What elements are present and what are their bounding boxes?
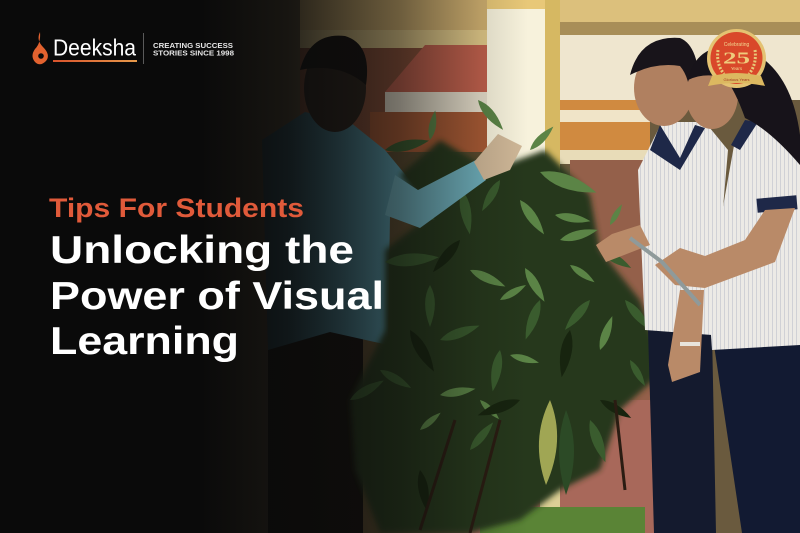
subtitle: Tips For Students [49,193,304,223]
tagline: CREATING SUCCESS [153,41,233,50]
bush [348,97,665,533]
badge: 25 years [707,29,766,88]
title [50,229,384,363]
badge: 25 years: Celebrating [724,42,750,48]
badge: 25 years: Years [731,66,743,71]
roof tile [385,45,487,92]
title: Power of Visual [50,275,384,318]
bush mass [350,140,665,533]
student right [655,45,800,533]
man's arm and hand [385,134,522,228]
badge: 25 years: Glorious Years [723,77,750,82]
tagline [153,41,234,58]
tagline: STORIES SINCE 1998 [153,48,234,58]
divider [143,33,144,64]
students [596,38,800,533]
underline [53,60,137,62]
man in blue shirt [262,36,486,533]
student left [596,38,728,533]
icon: flame [32,32,48,64]
badge: 25 years: 25 [723,48,750,68]
logo: Deeksha [32,32,234,64]
wordmark: Deeksha [53,34,136,60]
lower brick wall and grass [570,160,650,490]
title: Learning [50,320,239,363]
pillar [487,8,545,203]
title: Unlocking the [50,229,354,272]
